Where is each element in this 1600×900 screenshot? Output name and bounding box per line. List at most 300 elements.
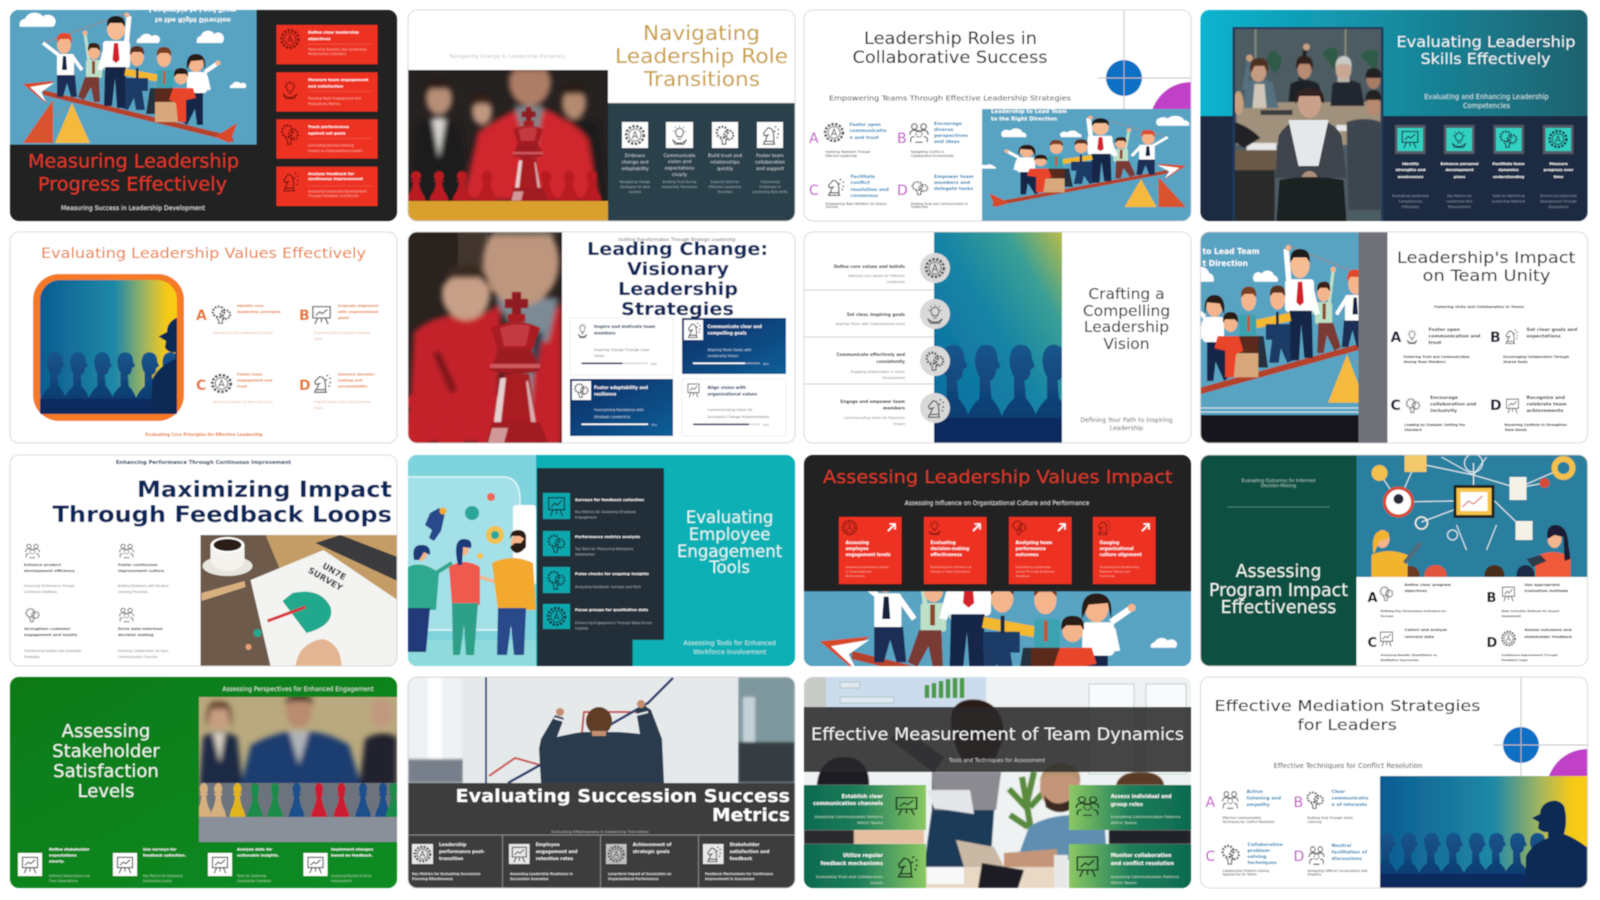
column: communicate vision: clearly xyxy=(672,172,687,178)
column: identify strengths: Identify xyxy=(1402,161,1419,166)
item B xyxy=(1490,327,1577,364)
column: communicate vision: vision and xyxy=(668,159,691,165)
item D: Recognize and xyxy=(1526,395,1565,401)
tile: conflict resolution: Within Teams xyxy=(1111,880,1137,885)
item C: Collaborative xyxy=(1248,842,1283,848)
item C: C xyxy=(1206,849,1216,865)
title: on Team Unity xyxy=(1422,266,1550,285)
item A xyxy=(196,304,281,335)
item C: Facilitate xyxy=(850,174,875,180)
title xyxy=(1397,248,1576,285)
item A: Fostering Trust and Communication xyxy=(1404,355,1470,359)
item C xyxy=(1368,627,1448,662)
tile 3: Analyzing team xyxy=(1016,540,1053,545)
item: engage: Impact xyxy=(893,422,906,426)
column: facilitate dynamics: Facilitate team xyxy=(1492,161,1525,166)
title: Leadership Roles in xyxy=(864,29,1037,48)
tile 4 xyxy=(1093,517,1156,584)
item 3: Tools for Gathering xyxy=(236,874,266,878)
subtitle: Assessing Perspectives for Enhanced Engagement xyxy=(222,686,374,693)
tile 4: culture alignment xyxy=(1100,552,1142,557)
item D xyxy=(1486,627,1572,662)
item B: Encouraging Collaboration Through xyxy=(1503,355,1570,359)
panel: Evaluating Leadership Values Effectively xyxy=(10,232,397,443)
subtitle: Measuring Success in Leadership Development xyxy=(61,205,206,212)
subtitle: Decision-Making xyxy=(1261,483,1296,489)
column: identify strengths: weaknesses xyxy=(1398,174,1424,179)
column 3: Organizational Performance xyxy=(608,877,659,881)
illustration: team close-up xyxy=(803,590,1192,667)
item D: stakeholder feedback xyxy=(1524,634,1572,639)
item: focus groups xyxy=(543,604,652,630)
column 2: Succession Scenarios xyxy=(510,877,549,881)
title: Skills Effectively xyxy=(1420,50,1551,68)
item 2: improvement culture xyxy=(118,568,165,573)
column 1: Planning Effectiveness xyxy=(412,877,453,881)
column: communicate vision: Leadership Transitions xyxy=(662,185,698,189)
title: Leadership Role xyxy=(615,44,788,68)
title xyxy=(587,239,768,320)
column: measure progress: time xyxy=(1554,174,1564,179)
item B: goals xyxy=(338,316,350,320)
panel: Evaluating Employee Engagement Tools xyxy=(398,455,795,666)
tile: feedback mechanisms: feedback mechanisms xyxy=(821,861,883,867)
text xyxy=(308,77,368,88)
illustration: team flipped: Leadership to Lead Team xyxy=(991,109,1067,115)
subtitle: Leadership xyxy=(1110,425,1143,432)
item 4: Implement changes xyxy=(331,846,374,852)
tile: inspire: members xyxy=(594,330,616,336)
subtitle: Assessing Influence on Organizational Culture and Performance xyxy=(905,501,1090,507)
column: communicate vision xyxy=(662,122,698,189)
item 4: Fostering Collaboration via Open xyxy=(118,649,169,653)
column: build trust: Build trust and xyxy=(708,153,742,159)
item 4: based on feedback. xyxy=(331,852,373,858)
title: Through Feedback Loops xyxy=(52,502,392,528)
subtitle: Defining Your Path to Inspiring xyxy=(1080,417,1173,424)
column: identify strengths xyxy=(1392,125,1429,209)
title: Effective Mediation Strategies xyxy=(1214,697,1480,715)
item 4 xyxy=(304,846,374,883)
item 1: clearly. xyxy=(49,858,65,864)
item: engage: Communicating Vision for Maximum xyxy=(843,416,906,420)
item 3: engagement and loyalty xyxy=(24,632,78,637)
item A: A xyxy=(809,131,819,147)
item B: Data Collection Methods for Impact xyxy=(1502,609,1560,613)
item 1 xyxy=(24,544,75,594)
item A: trust xyxy=(1428,340,1442,346)
decorative geometric accent xyxy=(1494,677,1600,831)
illustration: network and analysts xyxy=(1356,454,1588,578)
item 4: Communication Channels xyxy=(118,655,158,659)
item B: B xyxy=(897,131,907,147)
column 4: satisfaction and xyxy=(730,849,769,855)
tile: clear channels: communication channels xyxy=(813,801,883,807)
column: facilitate dynamics: dynamics xyxy=(1498,167,1519,172)
item C: collaboration and xyxy=(1430,402,1476,408)
column 4: feedback xyxy=(730,856,752,862)
item C xyxy=(809,174,889,209)
subtitle xyxy=(683,640,776,656)
item C: Qualitative Approaches xyxy=(1380,658,1419,662)
illustration: team on plank: Leadership to Lead Team xyxy=(149,6,236,13)
title: Evaluating Succession Success xyxy=(456,787,790,807)
item: focus groups: Focus groups for qualitative data xyxy=(575,607,648,612)
tile: feedback mechanisms: Levels xyxy=(871,880,883,885)
card: track performance xyxy=(276,119,378,159)
column: facilitate dynamics: Leadership Potential xyxy=(1492,200,1525,204)
top subtitle: Enhancing Performance Through Continuous Improvement xyxy=(116,460,292,466)
tile 2 xyxy=(924,517,986,584)
item C: inclusivity xyxy=(1430,408,1457,414)
tile 1 xyxy=(839,517,902,584)
subtitle: Assessing Tools for Enhanced xyxy=(683,640,776,647)
item C: engagement and xyxy=(237,378,273,382)
tile: individual roles: group roles xyxy=(1111,802,1143,808)
item: communicate: Development xyxy=(882,376,906,380)
icon: chess xyxy=(284,173,299,191)
item A: Effective Leadership xyxy=(826,154,857,158)
item B: and ideas xyxy=(934,139,960,145)
icon: gear xyxy=(282,30,298,48)
column: identify strengths: Effectively xyxy=(1402,205,1419,209)
title: Program Impact xyxy=(1209,581,1348,601)
item A: Active xyxy=(1246,789,1263,795)
photo: chess king xyxy=(408,69,609,202)
item C: resolution and xyxy=(850,187,889,193)
column 4: Stakeholder xyxy=(730,842,760,848)
illustration: team close-up: to Lead Team xyxy=(1202,247,1260,256)
item A: A xyxy=(1206,795,1216,811)
item A: Effective Communication xyxy=(1222,816,1261,820)
left green column xyxy=(1200,455,1356,666)
tile: foster adaptability: Strategic Leadership xyxy=(594,415,631,419)
item 2: Learning Processes xyxy=(118,590,148,594)
tile: inspire: Inspire and motivate team xyxy=(594,324,655,329)
title: Engagement xyxy=(677,542,783,561)
tile: individual roles: Evaluating Communication Patterns xyxy=(1111,814,1180,819)
icon: bulb xyxy=(283,80,297,98)
column: enhance development xyxy=(1440,125,1479,209)
title: Vision xyxy=(1103,335,1150,353)
column: embrace change xyxy=(620,122,650,194)
column 1: transition xyxy=(439,856,463,862)
title: Assessing xyxy=(62,721,150,742)
tile: foster adaptability: Overcoming Resistance with xyxy=(594,408,644,412)
card: track performance: Impact on Organizational Growth xyxy=(308,149,363,153)
item 4: Analyzing Results to Drive xyxy=(331,874,372,878)
item B: Evaluating Ethical Decision-Making xyxy=(314,331,370,335)
item A: Identifying Core Leadership Principles xyxy=(213,331,273,335)
photo: survey clipboard: SURVEY xyxy=(306,566,345,594)
item A: Among Team Members xyxy=(1404,360,1446,364)
subtitle: Evaluating and Enhancing Leadership xyxy=(1424,93,1549,101)
item 2: Use surveys for xyxy=(143,846,176,852)
item A xyxy=(809,122,887,158)
panel: Navigating Leadership Role Transitions xyxy=(406,10,795,221)
item D xyxy=(299,372,376,410)
item D: accountability xyxy=(338,384,368,388)
title: Stakeholder xyxy=(52,741,160,762)
item A: Define clear program xyxy=(1404,582,1451,587)
title xyxy=(28,152,239,196)
item D: Neutral xyxy=(1332,843,1352,849)
title xyxy=(852,30,1048,64)
column 2: Assessing Leadership Readiness in xyxy=(510,872,574,876)
item 3: Strengthen customer xyxy=(24,626,71,631)
tile: foster adaptability: resilience xyxy=(594,392,617,396)
column: foster collaboration: Overcoming xyxy=(760,180,780,184)
column: embrace change: Leaders xyxy=(629,190,642,194)
column: enhance development: plans xyxy=(1454,174,1466,179)
item A: Identify core xyxy=(237,304,264,308)
text: Track performance xyxy=(308,124,349,129)
subtitle: Fostering Unity and Collaboration in Teams xyxy=(1434,305,1525,309)
photo: office team xyxy=(804,677,1191,888)
item B: Encourage xyxy=(934,121,962,127)
tile: feedback mechanisms xyxy=(804,844,926,888)
column: embrace change: Embrace xyxy=(625,153,645,159)
tile: individual roles: Assess individual and xyxy=(1111,794,1172,800)
column: measure progress: Assessment xyxy=(1549,205,1569,209)
panel: Effective Mediation Strategies for Leaders xyxy=(1200,677,1600,900)
column: facilitate dynamics: understanding xyxy=(1493,174,1524,179)
illustration: people shaking hands xyxy=(407,454,537,667)
tile 1: employee xyxy=(846,546,869,551)
item 4: decision making xyxy=(118,632,154,637)
column: communicate vision: expectations xyxy=(665,166,695,172)
tile 3: Quantifying Leadership xyxy=(1016,565,1051,569)
column: enhance development: Leadership Skill xyxy=(1447,200,1473,204)
column 2: engagement and xyxy=(536,849,578,855)
illustration: team close-up xyxy=(1200,232,1360,416)
tile: foster adaptability: Foster adaptability and xyxy=(594,385,648,390)
item 1: Their Expectations xyxy=(48,879,78,883)
item D xyxy=(1490,395,1568,432)
item D: D xyxy=(299,378,311,394)
item B: Assessment xyxy=(1502,614,1522,618)
subtitle: Navigating Change in Leadership Dynamics xyxy=(450,54,566,60)
column: facilitate dynamics: Tools for Identifying xyxy=(1491,194,1525,198)
panel: Leadership Roles in Collaborative Success xyxy=(804,10,1232,221)
item 3: Strategies xyxy=(24,655,40,659)
column: build trust: Effective Leadership xyxy=(709,185,741,189)
card: define objectives: Measuring Success: Key Leadership xyxy=(308,48,367,52)
item D: delegate tasks xyxy=(934,186,973,192)
illustration: team flipped xyxy=(981,108,1192,222)
tile: communicate: Leadership Vision xyxy=(708,354,738,358)
tile: communicate: Aligning Team Goals with xyxy=(708,348,752,352)
tile 1: engagement levels xyxy=(846,552,891,557)
item D: Building Trust and Communication in xyxy=(911,202,968,206)
panel: Crafting a Compelling Leadership Vision xyxy=(804,232,1274,470)
column 1: performance post- xyxy=(439,849,485,855)
item: set goals xyxy=(835,299,950,329)
title xyxy=(1209,562,1348,618)
item: set goals: Aligning Vision with Organizational Goals xyxy=(835,322,905,326)
item 4 xyxy=(118,608,169,659)
card: analyze feedback xyxy=(276,167,378,206)
column 4: Improvement in Succession xyxy=(705,877,755,881)
item: define core values: Leadership xyxy=(886,280,905,284)
item B: Collaborative Environments xyxy=(911,154,954,158)
item 2: Satisfaction Levels xyxy=(143,879,172,883)
title: Effectiveness xyxy=(1221,598,1336,618)
photo: meeting xyxy=(1232,27,1384,221)
item A xyxy=(1206,789,1281,824)
item: communicate: consistently xyxy=(876,359,905,364)
item B xyxy=(897,121,968,158)
title: Progress Effectively xyxy=(38,174,227,196)
tile 3: Feedback xyxy=(1016,574,1030,578)
subtitle: Workforce Involvement xyxy=(693,649,767,656)
title: Crafting a xyxy=(1088,285,1165,303)
column: enhance development: Measurement xyxy=(1448,205,1472,209)
photo: survey clipboard xyxy=(200,534,398,666)
item D: Team Bonds xyxy=(1504,428,1527,432)
tile 2: Evaluating the Influence of xyxy=(931,565,972,569)
item B: B xyxy=(1486,591,1496,606)
subtitle: Effective Techniques for Conflict Resolution xyxy=(1274,762,1422,770)
text: against set goals xyxy=(308,130,346,135)
title: Visionary xyxy=(627,259,729,280)
tile 3 xyxy=(1009,517,1072,584)
item: communicate: Engaging Stakeholders in Vision xyxy=(851,370,905,374)
column: identify strengths: strengths and xyxy=(1395,167,1426,172)
item D: Navigating Difficult Conversations with xyxy=(1308,869,1368,873)
tile: individual roles: Within Teams xyxy=(1111,820,1137,825)
item 3 xyxy=(23,609,82,659)
item: metrics: Satisfaction xyxy=(575,552,595,556)
title: Evaluating Leadership xyxy=(1396,33,1576,51)
panel: Assessing Stakeholder Satisfaction Levels xyxy=(10,677,401,888)
title xyxy=(1396,33,1576,68)
item 1: development efficiency xyxy=(24,568,75,573)
item B: perspectives xyxy=(934,133,968,139)
text: Define clear leadership xyxy=(308,30,359,34)
title xyxy=(616,24,788,87)
item: set goals: Set clear, inspiring goals xyxy=(847,312,905,317)
column: measure progress: Development Through xyxy=(1540,200,1577,204)
item B: Set clear goals and xyxy=(1526,327,1577,333)
row dividers xyxy=(804,290,934,384)
item C: Collect and analyze xyxy=(1404,627,1448,632)
item 3: Analyze data for xyxy=(237,846,272,852)
item B: Building Trust Through Active xyxy=(1308,816,1353,820)
item: surveys: Key Metrics for Assessing Employee xyxy=(575,510,636,514)
item A: communicatio xyxy=(850,128,887,134)
tile 2: Evaluating xyxy=(931,540,956,545)
card: define objectives: Performance Indicators xyxy=(308,52,347,56)
item: define core values: Define core values and beliefs xyxy=(834,264,906,269)
tile: individual roles xyxy=(1069,785,1191,830)
column: build trust: quickly xyxy=(717,166,733,172)
tile 3: outcomes xyxy=(1016,552,1039,557)
photo: survey clipboard: UN7E xyxy=(320,561,348,583)
item C: Measuring Impact on Team Dynamics xyxy=(213,400,273,404)
column: embrace change: Navigating Change xyxy=(620,180,650,184)
column: identify strengths: Evaluating Leadership xyxy=(1392,194,1429,198)
item C: C xyxy=(809,183,819,199)
tile: align vision xyxy=(682,379,786,436)
title: Employee xyxy=(689,525,770,544)
item A: Fostering Teamwork Through xyxy=(826,150,870,154)
item C: C xyxy=(196,378,206,394)
tile 2: Values on Team Dynamics xyxy=(931,570,970,574)
item D: Continuous Improvement Through xyxy=(1502,653,1557,657)
column: communicate vision: Building Trust During xyxy=(663,180,696,184)
tile 4: Outcomes xyxy=(1100,574,1115,578)
tile: clear channels xyxy=(804,785,926,830)
item 3: actionable insights. xyxy=(237,852,280,858)
title: Maximizing Impact xyxy=(137,477,392,503)
column: build trust: Transition xyxy=(716,190,733,194)
panel: Effective Measurement of Team Dynamics xyxy=(804,677,1191,888)
item D xyxy=(897,174,974,209)
item D: D xyxy=(1294,849,1304,865)
item 1: Continuous Feedback xyxy=(24,590,57,594)
item: surveys: Engagement xyxy=(575,516,597,520)
item C: problem- xyxy=(1248,848,1271,854)
column: embrace change: change and xyxy=(621,160,649,166)
item: communicate: Communicate effectively and xyxy=(836,352,905,357)
title: Navigating xyxy=(643,21,760,45)
item 1: Define stakeholder xyxy=(49,846,90,852)
item C: C xyxy=(1368,636,1377,651)
title: Evaluating Leadership Values Effectively xyxy=(41,246,366,262)
item C: Foster team xyxy=(237,372,262,376)
column: embrace change: Strategies for New xyxy=(620,185,650,189)
item D xyxy=(1294,843,1368,876)
panel: Leading Change Visionary Leadership Strategies xyxy=(403,218,795,443)
column: build trust: Essential Skills for xyxy=(711,180,740,184)
item B: with organizational xyxy=(338,310,378,314)
item A: Foster open xyxy=(1428,327,1460,333)
photo: man at growth chart xyxy=(408,676,796,784)
dark title band xyxy=(804,707,1191,772)
silhouette art xyxy=(933,232,1063,444)
item: metrics: Performance metrics analysis xyxy=(575,534,641,539)
item D: Assess outcomes and xyxy=(1524,627,1572,632)
item D: Enhance decision- xyxy=(338,372,376,376)
item 1 xyxy=(18,846,90,883)
tile: conflict resolution: Monitor collaboration xyxy=(1111,853,1172,859)
item C: Collaborative Problem-Solving xyxy=(1222,869,1269,873)
tile 4: Analyzing the Relationship xyxy=(1100,565,1140,569)
illustration: team close-up: t Direction xyxy=(1202,259,1248,268)
column: build trust xyxy=(708,122,742,194)
tile: clear channels: Within Teams xyxy=(857,820,883,825)
tile: align vision: Communicating Vision for xyxy=(708,408,753,412)
tile: communicate: 80% xyxy=(763,362,770,366)
item A: listening and xyxy=(1246,796,1281,802)
item A: A xyxy=(196,308,207,324)
title xyxy=(52,477,392,528)
item B: Clear xyxy=(1332,789,1346,795)
column 2: Employee xyxy=(536,842,560,848)
decorative geometric accent xyxy=(1097,10,1192,110)
dark base and grey strip xyxy=(1200,232,1388,443)
item 1: Defining Stakeholders and xyxy=(49,874,90,878)
photo: stakeholders and pawns xyxy=(198,696,398,843)
title: Leading Change: xyxy=(587,239,768,260)
item: metrics: Top Tools for Measuring Workplace xyxy=(574,547,633,551)
item 4: Improvement xyxy=(331,879,353,883)
column: measure progress: Enhancing Leadership xyxy=(1540,194,1577,198)
item B: communicatio xyxy=(1332,796,1369,802)
card: track performance: Evaluating Decision-Making xyxy=(308,143,354,147)
tile 4: Gauging xyxy=(1100,540,1119,545)
